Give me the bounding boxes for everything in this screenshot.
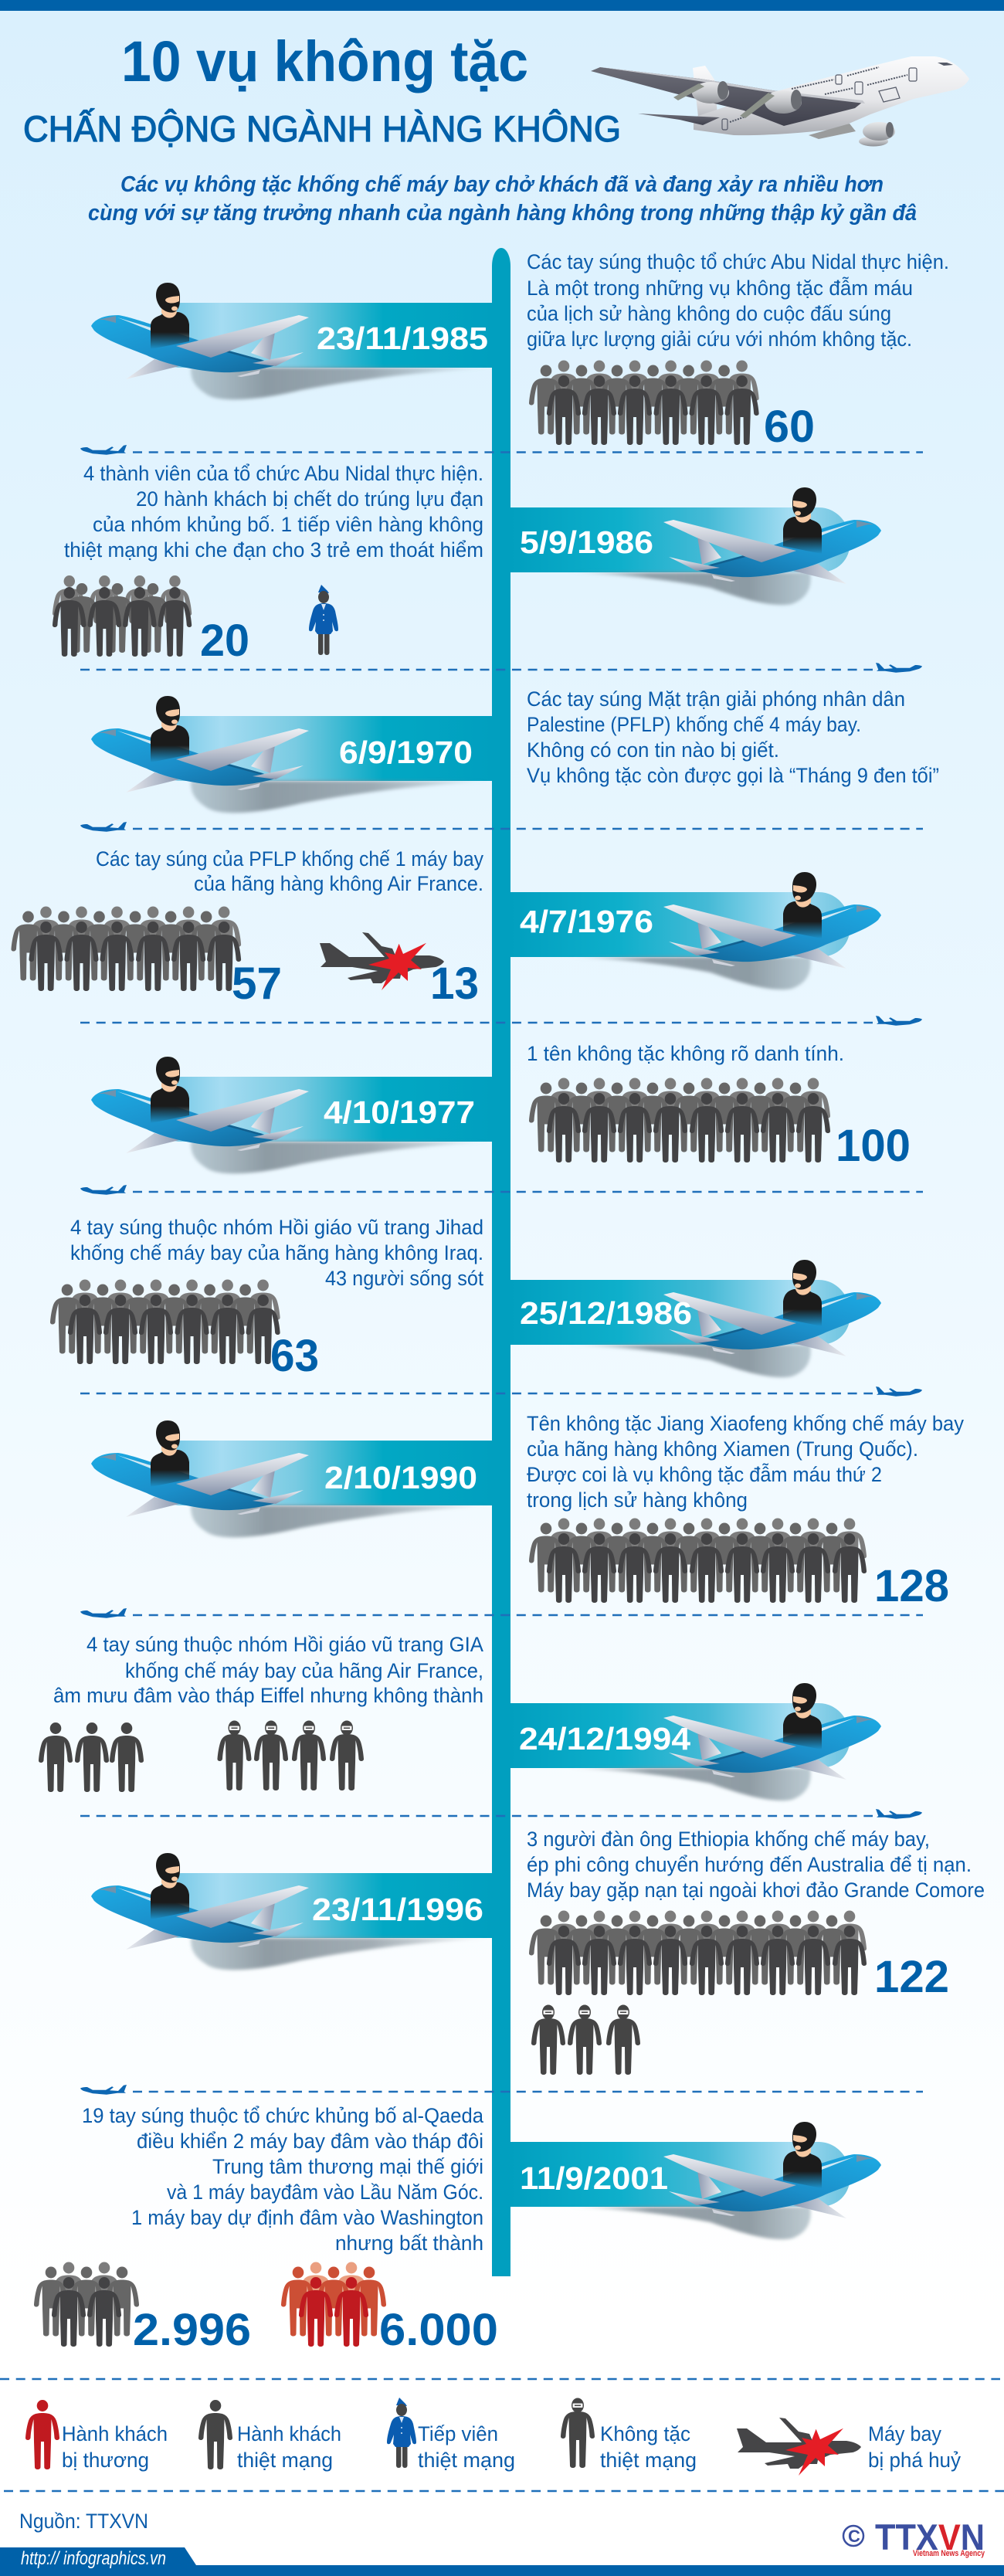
- title: 10 vụ không tặc: [121, 29, 528, 93]
- legend: bị phá huỷ: [868, 2449, 961, 2472]
- panel: event 1 23/11/1985: 60: [764, 402, 815, 452]
- logo: TTXVN: Vietnam News Agency: [913, 2549, 985, 2558]
- panel: event 2 5/9/1986: 20: [200, 616, 249, 666]
- panel: event 8 24/12/1994: 4 tay súng thuộc nhóm Hồi giáo vũ trang GIA: [86, 1633, 483, 1656]
- panel: event 1 23/11/1985: giữa lực lượng giải cứu với nhóm không tặc.: [527, 328, 912, 351]
- panel: event 1 23/11/1985: [91, 250, 949, 452]
- title: CHẤN ĐỘNG NGÀNH HÀNG KHÔNG: [23, 108, 621, 149]
- divider 8: [80, 1809, 922, 1819]
- panel: event 2 5/9/1986: 20 hành khách bị chết do trúng lựu đạn: [136, 487, 483, 511]
- panel: event 3 6/9/1970: Vụ không tặc còn được gọi là “Tháng 9 đen tối”: [527, 764, 939, 787]
- panel: event 3 6/9/1970: [91, 687, 939, 813]
- panel: event 6 25/12/1986: 43 người sống sót: [325, 1267, 483, 1290]
- panel: event 2 5/9/1986: 5/9/1986: [520, 524, 653, 560]
- panel: event 9 23/11/1996: 3 người đàn ông Ethiopia khống chế máy bay,: [527, 1828, 930, 1851]
- legend: thiệt mạng: [418, 2449, 515, 2472]
- panel: event 6 25/12/1986: khống chế máy bay của hãng hàng không Iraq.: [70, 1241, 483, 1264]
- panel: event 9 23/11/1996: Máy bay gặp nạn tại ngoài khơi đảo Grande Comore: [527, 1879, 985, 1902]
- panel: event 3 6/9/1970: Các tay súng Mặt trận giải phóng nhân dân: [527, 687, 905, 711]
- panel: event 9 23/11/1996: [91, 1828, 985, 2075]
- legend: Hành khách: [62, 2422, 168, 2445]
- panel: event 6 25/12/1986: 4 tay súng thuộc nhóm Hồi giáo vũ trang Jihad: [70, 1216, 483, 1239]
- panel: event 9 23/11/1996: 23/11/1996: [312, 1892, 483, 1927]
- panel: event 1 23/11/1985: của lịch sử hàng không do cuộc đấu súng: [527, 302, 891, 325]
- panel: event 1 23/11/1985: Các tay súng thuộc tổ chức Abu Nidal thực hiện.: [527, 250, 949, 273]
- panel: event 10 11/9/2001: [34, 2104, 881, 2355]
- panel: event 10 11/9/2001: 6.000: [379, 2305, 498, 2355]
- panel: event 10 11/9/2001: 1 máy bay dự định đâm vào Washington: [131, 2206, 483, 2229]
- panel: event 4 4/7/1976: 57: [232, 959, 282, 1009]
- panel: event 4 4/7/1976: 4/7/1976: [520, 904, 653, 939]
- panel: event 8 24/12/1994: âm mưu đâm vào tháp Eiffel nhưng không thành: [53, 1684, 483, 1707]
- divider 4: [80, 1016, 922, 1026]
- legend: thiệt mạng: [237, 2449, 333, 2472]
- panel: event 1 23/11/1985: Là một trong những vụ không tặc đẫm máu: [527, 276, 913, 300]
- panel: event 7 2/10/1990: [91, 1412, 964, 1611]
- panel: event 4 4/7/1976: của hãng hàng không Air France.: [194, 872, 483, 895]
- title: [23, 29, 621, 149]
- divider 3: [80, 822, 923, 832]
- divider 6: [80, 1386, 922, 1397]
- panel: event 10 11/9/2001: Trung tâm thương mại thế giới: [212, 2155, 483, 2178]
- panel: event 8 24/12/1994: 24/12/1994: [519, 1721, 690, 1756]
- legend: thiệt mạng: [600, 2449, 697, 2472]
- panel: event 10 11/9/2001: điều khiển 2 máy bay đâm vào tháp đôi: [137, 2130, 483, 2153]
- panel: event 8 24/12/1994: [39, 1633, 881, 1800]
- panel: event 7 2/10/1990: của hãng hàng không Xiamen (Trung Quốc).: [527, 1437, 918, 1461]
- legend: Hành khách: [237, 2422, 341, 2445]
- panel: event 7 2/10/1990: Được coi là vụ không tặc đẫm máu thứ 2: [527, 1462, 882, 1486]
- panel: event 6 25/12/1986: 63: [270, 1331, 319, 1381]
- divider 5: [80, 1185, 923, 1195]
- panel: event 10 11/9/2001: nhưng bất thành: [335, 2232, 483, 2255]
- panel: event 10 11/9/2001: và 1 máy bayđâm vào Lầu Năm Góc.: [167, 2181, 483, 2204]
- panel: event 7 2/10/1990: Tên không tặc Jiang Xiaofeng khống chế máy bay: [527, 1412, 964, 1435]
- panel: event 7 2/10/1990: 2/10/1990: [324, 1460, 477, 1495]
- panel: event 7 2/10/1990: 128: [874, 1561, 949, 1611]
- panel: event 4 4/7/1976: [11, 847, 881, 1009]
- logo: TTXVN: TTXVN: [875, 2517, 985, 2557]
- panel: timeline column: [492, 248, 510, 2276]
- divider 2: [80, 663, 922, 673]
- panel: event 3 6/9/1970: 6/9/1970: [339, 735, 473, 770]
- panel: event 6 25/12/1986: 25/12/1986: [520, 1295, 692, 1331]
- panel: event 2 5/9/1986: [53, 462, 881, 666]
- logo: TTXVN: C: [848, 2527, 860, 2546]
- panel: event 10 11/9/2001: 19 tay súng thuộc tổ chức khủng bố al-Qaeda: [82, 2104, 484, 2127]
- panel: event 9 23/11/1996: 122: [874, 1952, 949, 2002]
- panel: event 1 23/11/1985: 23/11/1985: [317, 321, 488, 356]
- panel: event 5 4/10/1977: [91, 1042, 911, 1173]
- panel: event 4 4/7/1976: Các tay súng của PFLP khống chế 1 máy bay: [96, 847, 483, 871]
- bottom band: [0, 2547, 1004, 2576]
- panel: event 5 4/10/1977: 4/10/1977: [324, 1095, 475, 1130]
- panel: event 4 4/7/1976: 13: [430, 959, 479, 1009]
- icon: airliner: [591, 56, 969, 147]
- legend: Không tặc: [600, 2422, 690, 2445]
- intro text: cùng với sự tăng trưởng nhanh của ngành hàng không trong những thập kỷ gần đâ: [88, 201, 917, 226]
- panel: event 2 5/9/1986: 4 thành viên của tổ chức Abu Nidal thực hiện.: [83, 462, 483, 485]
- intro text: [88, 172, 917, 226]
- top band: [0, 0, 1004, 11]
- divider 9: [80, 2085, 923, 2095]
- panel: event 10 11/9/2001: 11/9/2001: [520, 2160, 668, 2196]
- divider 7: [80, 1608, 923, 1618]
- panel: event 9 23/11/1996: ép phi công chuyển hướng đến Australia để tị nạn.: [527, 1853, 972, 1876]
- panel: event 8 24/12/1994: khống chế máy bay của hãng Air France,: [125, 1659, 483, 1682]
- panel: event 10 11/9/2001: 2.996: [133, 2305, 251, 2355]
- legend: bị thương: [62, 2449, 149, 2472]
- legend: Tiếp viên: [418, 2422, 498, 2445]
- legend: [0, 2379, 1004, 2491]
- legend: Máy bay: [868, 2422, 941, 2445]
- panel: event 2 5/9/1986: của nhóm khủng bố. 1 tiếp viên hàng không: [93, 513, 483, 536]
- panel: event 3 6/9/1970: Palestine (PFLP) khống chế 4 máy bay.: [527, 713, 861, 736]
- bottom band: http:// infographics.vn: [21, 2548, 166, 2569]
- panel: event 2 5/9/1986: thiệt mạng khi che đạn cho 3 trẻ em thoát hiểm: [64, 538, 483, 562]
- panel: event 6 25/12/1986: [50, 1216, 881, 1381]
- divider 1: [80, 445, 923, 455]
- panel: event 3 6/9/1970: Không có con tin nào bị giết.: [527, 738, 779, 762]
- panel: event 5 4/10/1977: 1 tên không tặc không rõ danh tính.: [527, 1042, 844, 1065]
- panel: event 7 2/10/1990: trong lịch sử hàng không: [527, 1488, 748, 1512]
- intro text: Các vụ không tặc khống chế máy bay chở khách đã và đang xảy ra nhiều hơn: [120, 172, 884, 197]
- panel: event 5 4/10/1977: 100: [836, 1121, 911, 1171]
- source: Nguồn: TTXVN: [19, 2510, 148, 2533]
